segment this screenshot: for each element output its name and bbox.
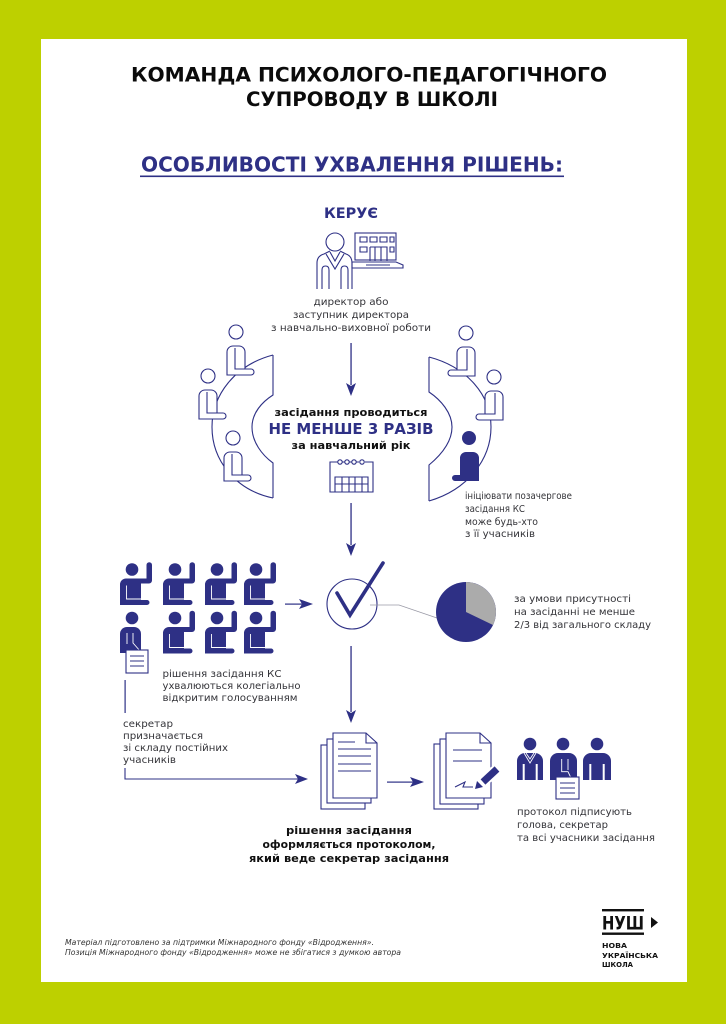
- pie chart: two thirds: [436, 582, 496, 642]
- text: director: [271, 297, 431, 334]
- arrow: vote to protocol: [346, 646, 356, 723]
- logo: NUSH: [602, 909, 659, 969]
- icon: voting members: [120, 562, 276, 654]
- logo: NUSH: ШКОЛА: [602, 961, 634, 969]
- icon: right participants: [448, 326, 503, 481]
- footer note: [65, 938, 401, 957]
- text: director: з навчально-виховної роботи: [271, 323, 431, 334]
- text: extraordinary meeting: засідання КС: [465, 503, 525, 515]
- text: extraordinary meeting: ініціювати позачергове: [465, 490, 572, 502]
- icon: document stack: [321, 733, 377, 809]
- text: extraordinary meeting: з її учасників: [465, 528, 535, 540]
- text: collegial decision: відкритим голосуванням: [162, 692, 298, 704]
- icon: signed document with pen: [434, 733, 497, 809]
- text: quorum: на засіданні не менше: [514, 606, 635, 618]
- text: collegial decision: ухвалюються колегіально: [162, 680, 300, 692]
- text: secretary: учасників: [123, 754, 176, 766]
- icon: director with laptop: [317, 233, 403, 289]
- text: meeting frequency: НЕ МЕНШЕ 3 РАЗІВ: [268, 420, 434, 438]
- left table arcs: [212, 355, 273, 498]
- connector line to pie: [370, 605, 437, 618]
- text: collegial decision: рішення засідання КС: [162, 668, 282, 680]
- icon: calendar: [330, 460, 373, 492]
- right table arcs: [429, 357, 491, 501]
- text: protocol kept by secretary: який веде секретар засідання: [249, 852, 449, 865]
- arrow: meeting to vote: [346, 503, 356, 556]
- text: protocol signed: [517, 806, 655, 844]
- text: protocol signed: голова, секретар: [517, 820, 608, 831]
- footer note: Позиція Міжнародного фонду «Відродження» може не збігатися з думкою автора: [65, 948, 401, 957]
- logo: NUSH: НОВА: [602, 942, 628, 950]
- heading: leads: КЕРУЄ: [324, 206, 378, 222]
- text: quorum: [514, 593, 651, 631]
- text: protocol kept by secretary: оформляється протоколом,: [262, 838, 436, 851]
- title: КОМАНДА ПСИХОЛОГО-ПЕДАГОГІЧНОГО: [131, 64, 607, 86]
- text: extraordinary meeting: [465, 490, 572, 540]
- text: quorum: за умови присутності: [514, 593, 631, 605]
- title: СУПРОВОДУ В ШКОЛІ: [246, 88, 498, 111]
- text: protocol kept by secretary: [249, 824, 449, 865]
- icon: left participants: [199, 325, 254, 481]
- arrow: secretary to protocol: [125, 768, 308, 784]
- subtitle with underline: ОСОБЛИВОСТІ УХВАЛЕННЯ РІШЕНЬ:: [141, 152, 563, 176]
- text: quorum: 2/3 від загального складу: [514, 619, 651, 631]
- text: meeting frequency: [268, 406, 434, 452]
- text: secretary: зі складу постійних: [123, 742, 228, 754]
- text: protocol signed: протокол підписують: [517, 806, 632, 818]
- text: extraordinary meeting: може будь-хто: [465, 517, 538, 528]
- arrow: document to signed: [387, 777, 424, 787]
- text: collegial decision: [162, 668, 300, 704]
- text: meeting frequency: за навчальний рік: [292, 439, 411, 452]
- text: director: директор або: [314, 297, 388, 308]
- text: protocol signed: та всі учасники засідання: [517, 832, 655, 844]
- logo: NUSH: УКРАЇНСЬКА: [602, 951, 659, 960]
- text: secretary: призначається: [123, 731, 203, 742]
- icon: three signers: [517, 738, 611, 799]
- text: protocol kept by secretary: рішення засідання: [286, 824, 412, 837]
- title: [131, 64, 607, 111]
- arrow: members to check: [285, 599, 313, 609]
- logo: NUSH: НУШ: [602, 912, 644, 934]
- arrow: director to meeting: [346, 343, 356, 396]
- text: director: заступник директора: [293, 310, 409, 321]
- text: secretary: [123, 719, 228, 766]
- icon: secretary with document: [120, 612, 148, 673]
- icon: check mark in circle: [327, 563, 383, 629]
- text: meeting frequency: засідання проводиться: [274, 406, 428, 419]
- text: secretary: секретар: [123, 719, 173, 730]
- footer note: Матеріал підготовлено за підтримки Міжнародного фонду «Відродження».: [65, 938, 374, 947]
- secretary connector line: [124, 680, 126, 713]
